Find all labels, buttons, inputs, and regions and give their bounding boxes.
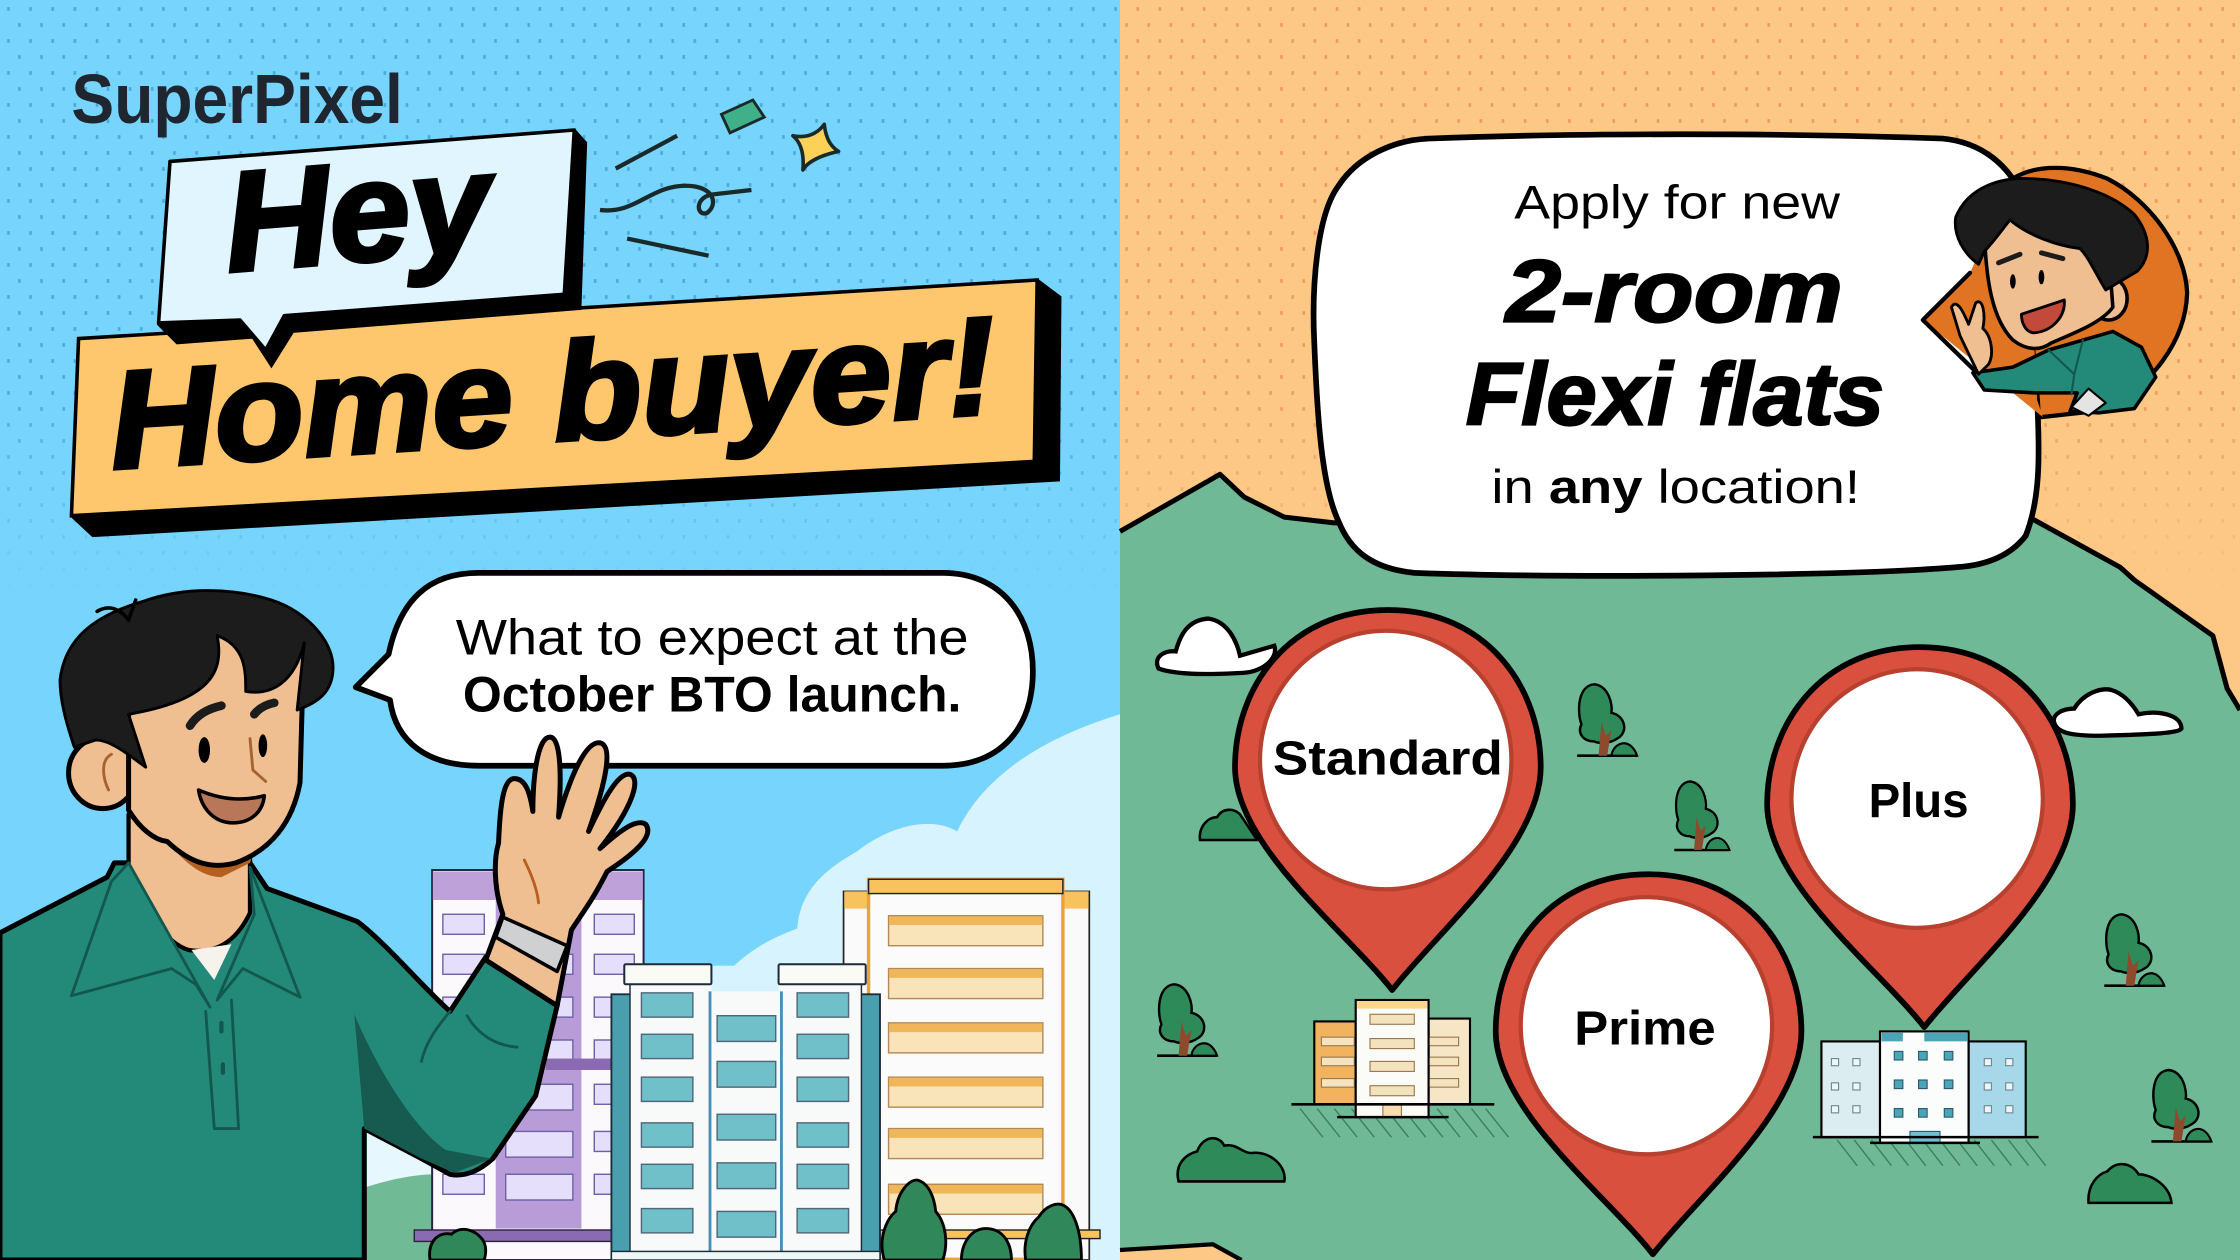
ear detail (104, 754, 111, 790)
green confetti (721, 100, 764, 133)
purple tower balcony (546, 1059, 611, 1070)
background cloud low (357, 1121, 436, 1197)
teal tower base (611, 1251, 880, 1260)
ear (69, 737, 137, 809)
collar (71, 863, 300, 1007)
left sky background (0, 0, 1120, 1260)
right sky background (1120, 0, 2240, 1260)
hair strand (97, 600, 136, 620)
building: orange tower (844, 879, 1100, 1260)
wristband (496, 917, 567, 971)
face (129, 629, 304, 865)
doodle line bottom (627, 239, 709, 256)
tree 2 (1674, 781, 1729, 850)
orange tower window shading (889, 916, 1042, 1194)
teal tower side strips (611, 994, 880, 1260)
purple tower roof band (433, 871, 643, 900)
Prime pin face (1521, 897, 1772, 1154)
blue cluster centre roofs (1881, 1033, 1967, 1041)
avatar backdrop edge (1923, 273, 1979, 374)
character: avatar badge (1923, 168, 2187, 417)
banner extruded shadow (71, 280, 1060, 536)
blue cluster side windows (1831, 1059, 2013, 1113)
character: waving man (0, 591, 648, 1260)
blue cluster hatch (1837, 1140, 2046, 1166)
green hill (1120, 474, 2240, 1260)
placket (206, 1000, 239, 1129)
bubble: 2-room Flexi flats (1314, 134, 2039, 576)
right dot pattern (1120, 0, 2240, 600)
bush: bottom right (2088, 1164, 2171, 1203)
background hill (357, 1174, 443, 1260)
orange tower base (871, 1230, 1100, 1239)
shirt buttons (221, 1023, 223, 1073)
line: Flexi flats: Flexi flats (1466, 344, 1884, 443)
avatar ear (2090, 277, 2127, 320)
tree 5 (2151, 1070, 2211, 1141)
foreground trees (430, 1180, 1081, 1260)
sleeve creases (421, 1011, 517, 1061)
buildings: blue cluster (1813, 1031, 2046, 1166)
eyebrows (190, 703, 274, 726)
tree left (430, 1229, 486, 1260)
line: 2-room: 2-room (1503, 241, 1843, 340)
blue cluster centre windows (1894, 1051, 1953, 1117)
tree middle large (882, 1180, 946, 1260)
character: avatar figure (1923, 178, 2156, 417)
orange cluster right block (1429, 1019, 1470, 1104)
orange tower centre (869, 879, 1063, 1259)
purple tower base (414, 1230, 614, 1241)
corner ground patch (1120, 1244, 1241, 1260)
orange cluster door (1383, 1104, 1401, 1117)
tree right (1025, 1204, 1081, 1260)
hill outline (1120, 474, 2240, 710)
Prime label: Prime (1574, 1001, 1716, 1055)
pin: Standard (1235, 610, 1541, 990)
teal tower column lines (710, 991, 781, 1251)
avatar eyes (2010, 270, 2044, 289)
orange cluster centre roof (1357, 1001, 1427, 1009)
Prime pin body (1496, 874, 1801, 1254)
orange cluster centre windows (1370, 1014, 1414, 1096)
speech bubble: BTO launch (356, 573, 1033, 766)
left dot pattern (0, 0, 1120, 600)
Plus label: Plus (1869, 774, 1969, 828)
teal tower body (630, 984, 861, 1260)
cloud: right (2054, 689, 2181, 736)
panel: right map (1120, 0, 2240, 1260)
bush: bottom left (1178, 1138, 1285, 1181)
doodles: sparks (600, 100, 839, 256)
orange cluster hatch (1300, 1109, 1509, 1137)
orange tower windows (889, 916, 1043, 1214)
speech bubble line two: October BTO launch. (463, 666, 961, 722)
blue cluster right block (1969, 1041, 2026, 1137)
Standard pin body (1235, 610, 1541, 990)
blue cluster centre block (1880, 1031, 1969, 1143)
orange tower roof (869, 879, 1063, 894)
yellow star (793, 124, 839, 170)
undershirt (191, 944, 231, 980)
Hey bubble shadow (159, 130, 586, 366)
doodle squiggle (600, 186, 751, 213)
orange tower side caps (844, 891, 1089, 909)
banner face (71, 280, 1037, 516)
banner text: Home buyer! (105, 289, 1000, 499)
teal tower roof notch (711, 966, 779, 991)
Standard label: Standard (1273, 731, 1503, 785)
teal tower windows (641, 993, 849, 1237)
avatar mouth (2021, 300, 2064, 333)
speech bubble shape (356, 573, 1033, 766)
buildings: orange cluster (1291, 1000, 1509, 1137)
bubble: Hey (159, 122, 586, 366)
avatar hair (1955, 178, 2148, 290)
bush: left small (1200, 810, 1257, 840)
orange tower wings (844, 891, 1089, 1260)
avatar peace hand (1951, 302, 1992, 374)
banner: Home buyer (71, 280, 1060, 536)
pin: Plus (1767, 647, 2073, 1027)
orange cluster ground lines (1291, 1104, 1494, 1117)
Plus pin face (1791, 669, 2043, 928)
avatar orange backdrop (1923, 168, 2187, 417)
avatar face (1984, 214, 2113, 348)
building: purple tower (414, 870, 644, 1260)
avatar shirt collar (2049, 340, 2083, 394)
main bubble shape (1314, 134, 2039, 576)
shirt sleeve shadow (354, 1014, 491, 1173)
line: in any location: in any location! (1491, 460, 1860, 513)
eyes (199, 734, 267, 763)
Hey bubble face (159, 130, 574, 350)
hand and forearm (486, 737, 648, 1006)
tree 4 (1157, 984, 1217, 1056)
speech bubble line one: What to expect at the (456, 609, 969, 665)
Hey text: Hey (219, 122, 502, 301)
pin: Prime (1496, 874, 1801, 1254)
cloud: left (1157, 619, 1275, 674)
palm crease (524, 860, 539, 903)
Standard pin face (1260, 631, 1511, 889)
avatar backdrop overlap (1923, 179, 2043, 417)
blue cluster left block (1821, 1041, 1880, 1137)
blue cluster door (1910, 1131, 1940, 1143)
Plus pin body (1767, 647, 2073, 1027)
tree middle small (961, 1229, 1011, 1260)
hair (60, 591, 333, 767)
blue cluster ground lines (1813, 1137, 2039, 1143)
line: Apply for new: Apply for new (1514, 176, 1841, 229)
avatar shirt (1973, 331, 2156, 413)
orange cluster side windows (1321, 1037, 1459, 1087)
neck shadow (167, 841, 257, 877)
orange cluster left block (1314, 1021, 1356, 1104)
orange cluster centre block (1356, 1000, 1429, 1117)
teal tower chimneys (624, 964, 866, 984)
avatar brows (1999, 253, 2063, 263)
shirt (0, 863, 557, 1260)
purple tower body (432, 870, 644, 1260)
avatar wristband (2071, 389, 2106, 416)
purple tower centre strip (496, 871, 581, 1229)
purple tower windows (443, 914, 634, 1200)
neck and chest (129, 814, 250, 951)
tree 3 (2104, 914, 2164, 986)
tree 1 (1577, 684, 1637, 756)
background cloud (707, 714, 1120, 1260)
logo: SuperPixel: SuperPixel (71, 60, 403, 138)
corner patch outline (1120, 1244, 1241, 1260)
building: teal tower (611, 964, 880, 1260)
nose (250, 739, 266, 781)
mouth (199, 790, 264, 823)
panel: left hero (0, 0, 1120, 1260)
doodle line top (616, 136, 677, 169)
